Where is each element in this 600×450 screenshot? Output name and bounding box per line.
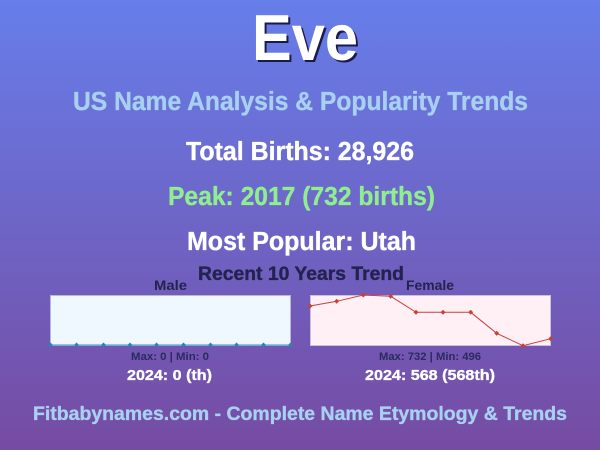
title: Eve (254, 3, 360, 76)
most popular: Most Popular: Utah (187, 228, 416, 256)
footer: Fitbabynames.com - Complete Name Etymology & Trends (33, 404, 567, 425)
peak: Peak: 2017 (732 births) (168, 183, 435, 211)
female label: Female (406, 278, 455, 293)
male label: Male (154, 278, 188, 293)
male 2024: 2024: 0 (th) (127, 367, 212, 384)
female max min: Max: 732 | Min: 496 (379, 351, 481, 363)
female plot area (310, 296, 550, 346)
trend heading: Recent 10 Years Trend (198, 264, 404, 285)
male line (48, 342, 293, 348)
panel: male chart (48, 278, 293, 384)
subtitle: US Name Analysis & Popularity Trends (73, 88, 528, 116)
female line (308, 292, 553, 348)
male plot area (50, 296, 290, 346)
total births: Total Births: 28,926 (186, 138, 414, 166)
panel: female chart (308, 278, 553, 384)
female 2024: 2024: 568 (568th) (365, 367, 495, 384)
male max min: Max: 0 | Min: 0 (131, 351, 209, 363)
title: Eve (252, 1, 358, 74)
